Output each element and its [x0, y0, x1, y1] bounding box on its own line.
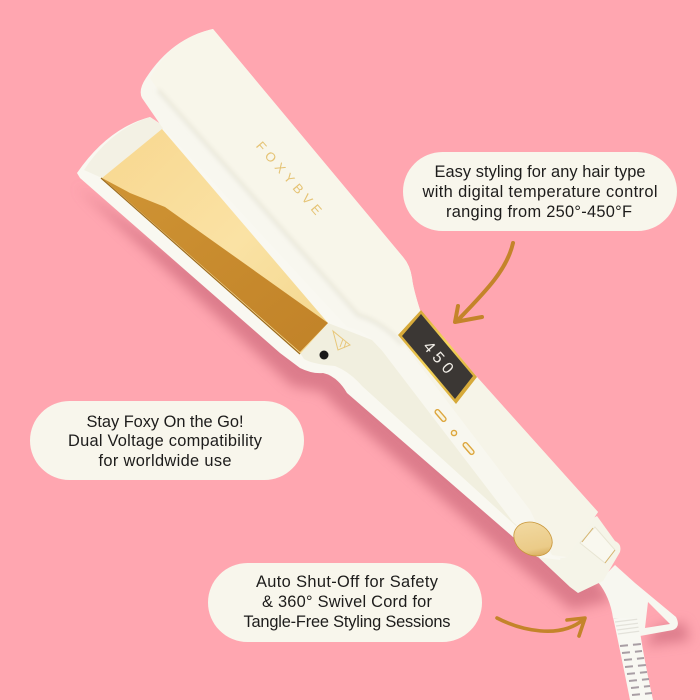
plate reflection: [102, 178, 328, 352]
callout: auto shut-off: Tangle-Free Styling Sessions: [244, 613, 450, 631]
hinge collar: [537, 516, 620, 593]
edge shading: [158, 90, 402, 344]
power socket: [320, 350, 328, 360]
callout: dual voltage: Dual Voltage compatibility: [68, 432, 263, 450]
lower arm: [77, 117, 570, 560]
callout: temperature control: with digital temperature control: [422, 183, 658, 201]
collar ribs: [580, 527, 615, 563]
cord ribs: [614, 615, 641, 634]
gold plate: [101, 129, 328, 354]
callout: temperature control: Easy styling for any hair type: [434, 163, 646, 181]
callout: dual voltage: [30, 401, 304, 480]
callout: auto shut-off: & 360° Swivel Cord for: [262, 593, 433, 611]
gold disc button: [508, 515, 558, 563]
callout: auto shut-off: Auto Shut-Off for Safety: [256, 573, 439, 591]
cord: [613, 615, 653, 700]
FOXYBAE logo: FOXYBVE: [253, 138, 325, 218]
callout: temperature control: [403, 152, 677, 231]
arrow: to swivel cord: [497, 618, 585, 636]
arrow: to display: [455, 243, 513, 322]
lower arm top surface: [84, 117, 165, 178]
callout: dual voltage: for worldwide use: [98, 452, 232, 470]
display reading: 450: [419, 338, 456, 378]
lower body face: [402, 310, 598, 557]
hinge panel: [300, 323, 534, 526]
upper arm face: [150, 29, 420, 342]
drop shadow: [76, 186, 690, 646]
control buttons: [434, 409, 475, 455]
callout: dual voltage: Stay Foxy On the Go!: [86, 413, 244, 431]
digital display: [398, 310, 477, 404]
temperature icon: [333, 331, 350, 350]
callout: auto shut-off: [208, 563, 482, 642]
swivel connector with hanging loop: [598, 565, 678, 636]
cord slots: [620, 644, 652, 695]
callout: temperature control: ranging from 250°-450°F: [446, 203, 632, 221]
upper arm: [141, 29, 598, 558]
